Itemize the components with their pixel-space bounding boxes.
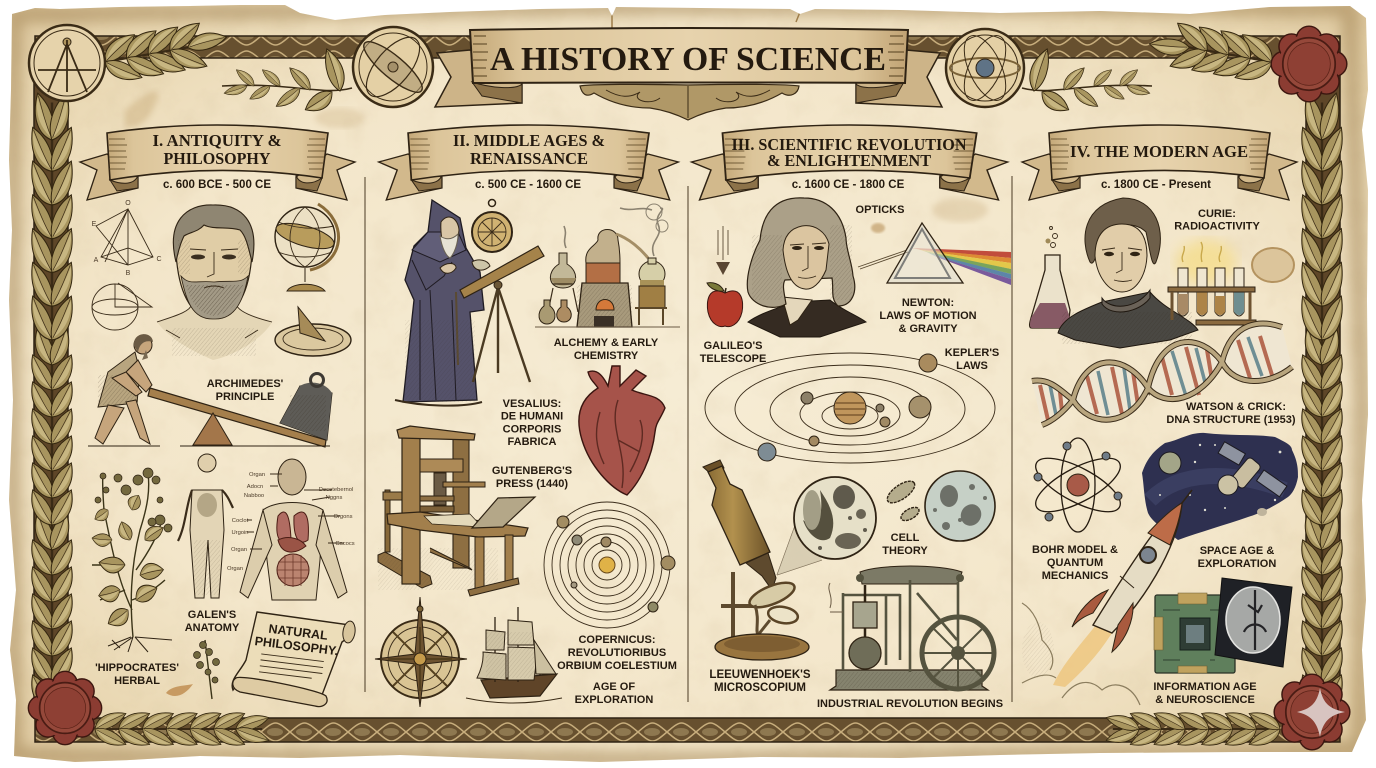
Bohr label: QUANTUM <box>1047 557 1103 569</box>
small herb sprig <box>194 640 220 699</box>
space age label: SPACE AGE & <box>1200 545 1274 557</box>
Newton label: NEWTON: <box>902 297 954 309</box>
small anatomical figure <box>178 454 233 598</box>
Galileo label: GALILEO'S <box>704 340 762 352</box>
chemistry flask <box>1030 226 1070 328</box>
age of exploration label: EXPLORATION <box>575 694 653 706</box>
Archimedes label: ARCHIMEDES' <box>207 378 284 390</box>
Watson and Crick label: DNA STRUCTURE (1953) <box>1166 414 1296 426</box>
section heading IV: IV. THE MODERN AGE <box>1070 142 1248 161</box>
section heading II: c. 500 CE - 1600 CE <box>475 179 581 191</box>
organ labels: Urgoin <box>231 530 249 536</box>
organ labels: Orgons <box>333 514 353 520</box>
geometry sketches: C <box>156 256 162 263</box>
medallion: dividers <box>29 25 105 101</box>
geometry sketches: O <box>125 200 131 207</box>
title text: A HISTORY OF SCIENCE <box>490 41 886 78</box>
Vesalius label: CORPORIS <box>503 423 561 435</box>
Newton label: & GRAVITY <box>898 323 958 335</box>
Hippocrates label: HERBAL <box>114 675 160 687</box>
organ labels: Organ <box>231 547 247 553</box>
industrial revolution label: INDUSTRIAL REVOLUTION BEGINS <box>817 698 1003 710</box>
wax seal: top right <box>1271 26 1347 102</box>
glowing test tubes <box>1168 240 1256 325</box>
medicinal herb <box>91 468 172 652</box>
anatomical heart <box>579 366 665 495</box>
Curie portrait <box>1058 198 1198 348</box>
section heading IV <box>1022 125 1297 200</box>
title banner <box>435 28 942 120</box>
information age label: INFORMATION AGE <box>1153 681 1257 693</box>
wax seal: bottom left <box>28 671 102 745</box>
Archimedes label: PRINCIPLE <box>216 391 274 403</box>
medallion: celestial globe <box>946 29 1024 107</box>
bacteria <box>884 477 921 523</box>
organ labels: Organ <box>249 472 265 478</box>
Opticks label: OPTICKS <box>856 204 904 216</box>
Copernicus label: COPERNICUS: <box>578 634 656 646</box>
geometry sketches <box>92 200 162 330</box>
organ labels: Nggns <box>326 495 342 501</box>
steam engine <box>829 566 994 690</box>
organ labels: Adocn <box>247 484 263 490</box>
prism and rainbow <box>858 223 1011 285</box>
organ labels <box>227 472 355 572</box>
Copernicus label: ORBIUM COELESTIUM <box>557 660 677 672</box>
cell theory label: CELL <box>891 532 920 544</box>
medallion: armillary sphere <box>353 27 433 107</box>
scroll: natural philosophy: NATURAL <box>268 622 329 643</box>
Archimedes lever <box>88 334 332 447</box>
sailing ship <box>466 607 562 703</box>
Galen label: ANATOMY <box>185 622 240 634</box>
space scene with satellite <box>1142 433 1298 540</box>
panel: Antiquity and Philosophy <box>80 125 356 707</box>
section heading II: RENAISSANCE <box>470 149 588 168</box>
geometry sketches: B <box>126 270 131 277</box>
marble bust <box>157 205 272 360</box>
organ labels: Decetebernol <box>319 487 353 493</box>
section heading II: II. MIDDLE AGES & <box>453 131 605 150</box>
panel: The Modern Age <box>1022 125 1298 706</box>
Galen label: GALEN'S <box>188 609 236 621</box>
Hippocrates label: 'HIPPOCRATES' <box>95 662 179 674</box>
geometry sketches: E <box>92 221 97 228</box>
Kepler label: KEPLER'S <box>945 347 999 359</box>
section heading II <box>379 125 678 200</box>
column dividers <box>365 176 1012 702</box>
pocket dial <box>472 200 512 252</box>
alchemy label: CHEMISTRY <box>574 350 639 362</box>
falling apple <box>707 226 743 327</box>
Watson and Crick label: WATSON & CRICK: <box>1186 401 1286 413</box>
scroll: natural philosophy: PHILOSOPHY. <box>254 634 339 658</box>
Vesalius label: FABRICA <box>508 436 556 448</box>
organ labels: Nabboo <box>244 493 264 499</box>
section heading III: & ENLIGHTENMENT <box>767 151 932 170</box>
organ labels: Organ <box>227 566 243 572</box>
Vesalius label: VESALIUS: <box>503 398 561 410</box>
section heading I: I. ANTIQUITY & <box>152 131 282 150</box>
scroll: natural philosophy <box>232 612 356 707</box>
space age label: EXPLORATION <box>1198 558 1276 570</box>
microscope specimen cell <box>794 477 876 559</box>
printing press <box>378 426 535 596</box>
panel: Middle Ages and Renaissance <box>375 125 680 707</box>
cell theory label: THEORY <box>882 545 928 557</box>
Gutenberg label: PRESS (1440) <box>496 478 568 490</box>
Newton portrait <box>747 198 866 337</box>
information age label: & NEUROSCIENCE <box>1155 694 1255 706</box>
Curie label: CURIE: <box>1198 208 1236 220</box>
terrestrial globe <box>273 204 339 291</box>
organ labels: Coclot <box>232 518 249 524</box>
age of exploration label: AGE OF <box>593 681 635 693</box>
Leeuwenhoek label: MICROSCOPIUM <box>714 682 806 694</box>
geometry sketches: A <box>94 257 99 264</box>
compass rose <box>375 597 467 707</box>
wax seal: bottom right <box>1274 674 1350 750</box>
Bohr label: BOHR MODEL & <box>1032 544 1118 556</box>
Curie label: RADIOACTIVITY <box>1174 220 1260 232</box>
alchemy apparatus <box>535 204 680 327</box>
Kepler label: LAWS <box>956 360 988 372</box>
large anatomical figure with organs <box>240 459 347 600</box>
round cell <box>925 471 995 541</box>
hooded monk <box>395 200 490 406</box>
section heading III: c. 1600 CE - 1800 CE <box>792 179 905 191</box>
Leeuwenhoek microscope <box>703 460 822 660</box>
Newton label: LAWS OF MOTION <box>879 310 977 322</box>
rocket <box>1022 490 1192 705</box>
telescope on tripod <box>460 246 544 382</box>
panel: Scientific Revolution and Enlightenment <box>691 125 1011 710</box>
section heading I: c. 600 BCE - 500 CE <box>163 179 271 191</box>
Vesalius label: DE HUMANI <box>501 411 563 423</box>
sundial <box>275 307 351 356</box>
Leeuwenhoek label: LEEUWENHOEK'S <box>709 669 811 681</box>
section heading III <box>691 125 1008 200</box>
Kepler orbits <box>705 353 995 463</box>
section heading I: PHILOSOPHY <box>164 149 270 168</box>
Bohr atom <box>1029 438 1127 532</box>
brain scan <box>1215 578 1292 667</box>
DNA double helix <box>1032 324 1292 425</box>
alchemy label: ALCHEMY & EARLY <box>554 337 659 349</box>
Gutenberg label: GUTENBERG'S <box>492 465 572 477</box>
section heading IV: c. 1800 CE - Present <box>1101 179 1211 191</box>
Bohr label: MECHANICS <box>1042 570 1108 582</box>
title scrollwork ornament <box>580 84 799 120</box>
Galileo label: TELESCOPE <box>700 353 766 365</box>
circuit chip <box>1154 593 1235 673</box>
Copernican orbits <box>544 502 675 628</box>
section heading III: III. SCIENTIFIC REVOLUTION <box>732 135 967 154</box>
Copernicus label: REVOLUTIORIBUS <box>568 647 666 659</box>
organ labels: Cacocs <box>335 541 355 547</box>
section heading I <box>80 125 355 200</box>
